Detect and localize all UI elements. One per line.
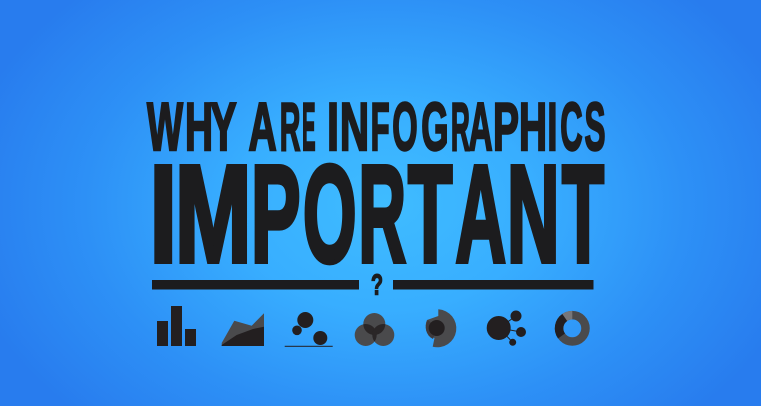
heading: important: R (358, 138, 406, 292)
infographic title slide: T (562, 138, 604, 292)
icon: area chart (222, 313, 264, 346)
heading: important: P (251, 138, 300, 292)
heading: important: M (175, 138, 252, 292)
icon: donut chart (559, 315, 586, 341)
question mark: ? (371, 269, 383, 301)
heading: important: I (150, 138, 177, 292)
heading: why are infographics: H (185, 89, 213, 165)
heading: why are infographics: O (392, 89, 418, 165)
rule: right (393, 280, 594, 290)
heading: important: T (408, 138, 452, 292)
heading: why are infographics: F (371, 89, 390, 165)
heading: why are infographics: R (451, 89, 470, 165)
icon: bubble chart (285, 312, 333, 347)
icon: node diagram (487, 311, 526, 345)
infographic title slide: S (584, 89, 606, 165)
icon: radial pie chart (426, 309, 456, 347)
heading: why are infographics: I (547, 89, 557, 165)
heading: important: N (507, 138, 560, 292)
heading: why are infographics: C (560, 89, 583, 165)
icon: venn diagram (355, 313, 394, 346)
heading: important: A (456, 138, 506, 292)
heading: why are infographics: A (248, 89, 277, 165)
rule: left (152, 280, 359, 290)
heading: why are infographics: A (468, 89, 493, 165)
icon: bar chart (157, 306, 196, 346)
heading: why are infographics: R (280, 89, 300, 165)
heading: why are infographics: I (327, 89, 339, 165)
heading: why are infographics: H (519, 89, 547, 165)
heading: important: O (303, 138, 356, 292)
heading: why are infographics: N (340, 89, 369, 165)
heading: why are infographics: W (147, 89, 183, 165)
heading: why are infographics: P (493, 89, 519, 165)
heading: why are infographics: E (302, 89, 316, 165)
heading: why are infographics: Y (210, 89, 236, 165)
heading: why are infographics: G (421, 89, 448, 165)
